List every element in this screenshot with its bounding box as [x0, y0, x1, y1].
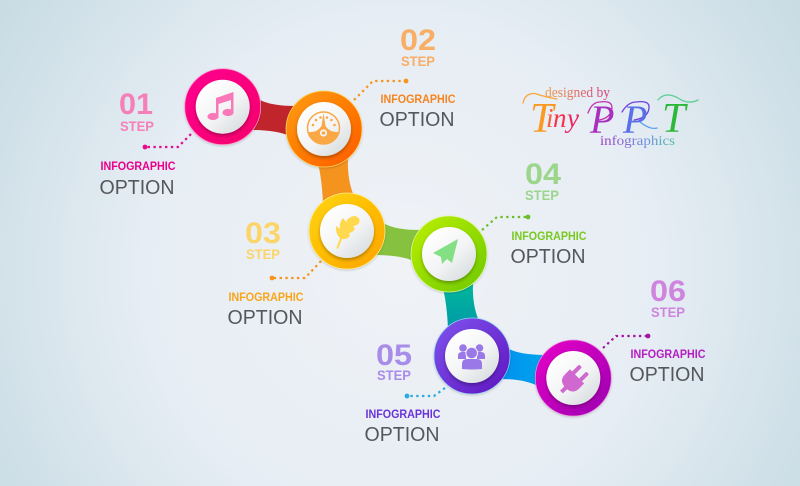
icon: gauge	[308, 112, 340, 144]
label: option 03: INFOGRAPHIC	[228, 292, 304, 304]
step 4 node	[411, 216, 487, 292]
label: step 02: STEP	[401, 53, 435, 69]
label: step 01	[119, 88, 154, 134]
label: option 02	[380, 94, 456, 131]
icon: paper plane	[433, 239, 458, 264]
logo: designed by Tiny PPT infographics: T	[530, 96, 556, 142]
label: step 03: STEP	[246, 246, 280, 262]
logo: designed by Tiny PPT infographics: n	[553, 103, 566, 133]
label: option 03: OPTION	[228, 307, 302, 329]
logo: designed by Tiny PPT infographics	[523, 85, 698, 148]
label: option 05: INFOGRAPHIC	[366, 409, 440, 421]
step 5 node	[434, 318, 510, 394]
label: step 03	[245, 217, 281, 262]
logo: designed by Tiny PPT infographics: i	[546, 103, 554, 133]
label: step 05: STEP	[377, 367, 411, 383]
leader line 1	[143, 134, 191, 149]
icon: feather	[336, 216, 360, 249]
leader line 3	[270, 261, 321, 280]
logo: designed by Tiny PPT infographics: infographics	[600, 133, 675, 148]
label: option 02: OPTION	[380, 109, 454, 131]
label: step 05	[376, 339, 412, 383]
logo: designed by Tiny PPT infographics: P	[589, 97, 614, 142]
label: step 01: 01	[119, 88, 153, 121]
logo: designed by Tiny PPT infographics: P	[622, 97, 647, 142]
logo: designed by Tiny PPT infographics: y	[564, 103, 579, 133]
label: step 06: STEP	[651, 304, 685, 320]
label: option 01	[100, 161, 176, 199]
logo: designed by Tiny PPT infographics: designed by	[545, 85, 611, 101]
connector: 04 to 05	[443, 283, 479, 329]
label: option 01: INFOGRAPHIC	[100, 161, 176, 173]
label: option 04: OPTION	[510, 246, 586, 268]
icon: plug	[554, 362, 591, 399]
label: option 04	[510, 231, 586, 268]
label: option 05: OPTION	[364, 424, 440, 446]
label: option 03	[228, 292, 304, 329]
label: step 04	[525, 158, 561, 203]
connector: 02 to 03	[318, 158, 354, 204]
step 3 node	[309, 193, 385, 269]
label: step 03: 03	[245, 217, 281, 250]
leader line 2	[354, 79, 408, 100]
label: step 01: STEP	[120, 118, 154, 134]
label: step 02	[400, 24, 436, 69]
step 2 node	[286, 91, 362, 167]
label: step 02: 02	[400, 24, 436, 57]
logo: designed by Tiny PPT infographics: T	[662, 96, 688, 142]
leader line 6	[603, 334, 650, 348]
step 6 node	[535, 340, 611, 416]
label: option 06	[630, 349, 706, 386]
connector: 03 to 04	[376, 223, 420, 261]
label: step 06: 06	[650, 275, 686, 308]
label: option 06: OPTION	[630, 364, 704, 386]
label: option 02: INFOGRAPHIC	[380, 94, 456, 106]
icon: music note	[207, 92, 234, 120]
leader line 5	[405, 388, 445, 398]
icon: group of people	[458, 344, 485, 370]
label: option 06: INFOGRAPHIC	[630, 349, 706, 361]
label: step 06	[650, 275, 686, 320]
label: step 05: 05	[376, 339, 412, 372]
leader line 4	[482, 215, 530, 230]
label: option 01: OPTION	[100, 177, 174, 199]
connector: 01 to 02	[251, 99, 296, 136]
label: option 04: INFOGRAPHIC	[512, 231, 586, 243]
connector: 05 to 06	[501, 348, 545, 386]
label: step 04: 04	[525, 158, 561, 191]
step 1 node	[185, 69, 261, 145]
label: option 05	[364, 409, 440, 446]
label: step 04: STEP	[525, 187, 559, 203]
